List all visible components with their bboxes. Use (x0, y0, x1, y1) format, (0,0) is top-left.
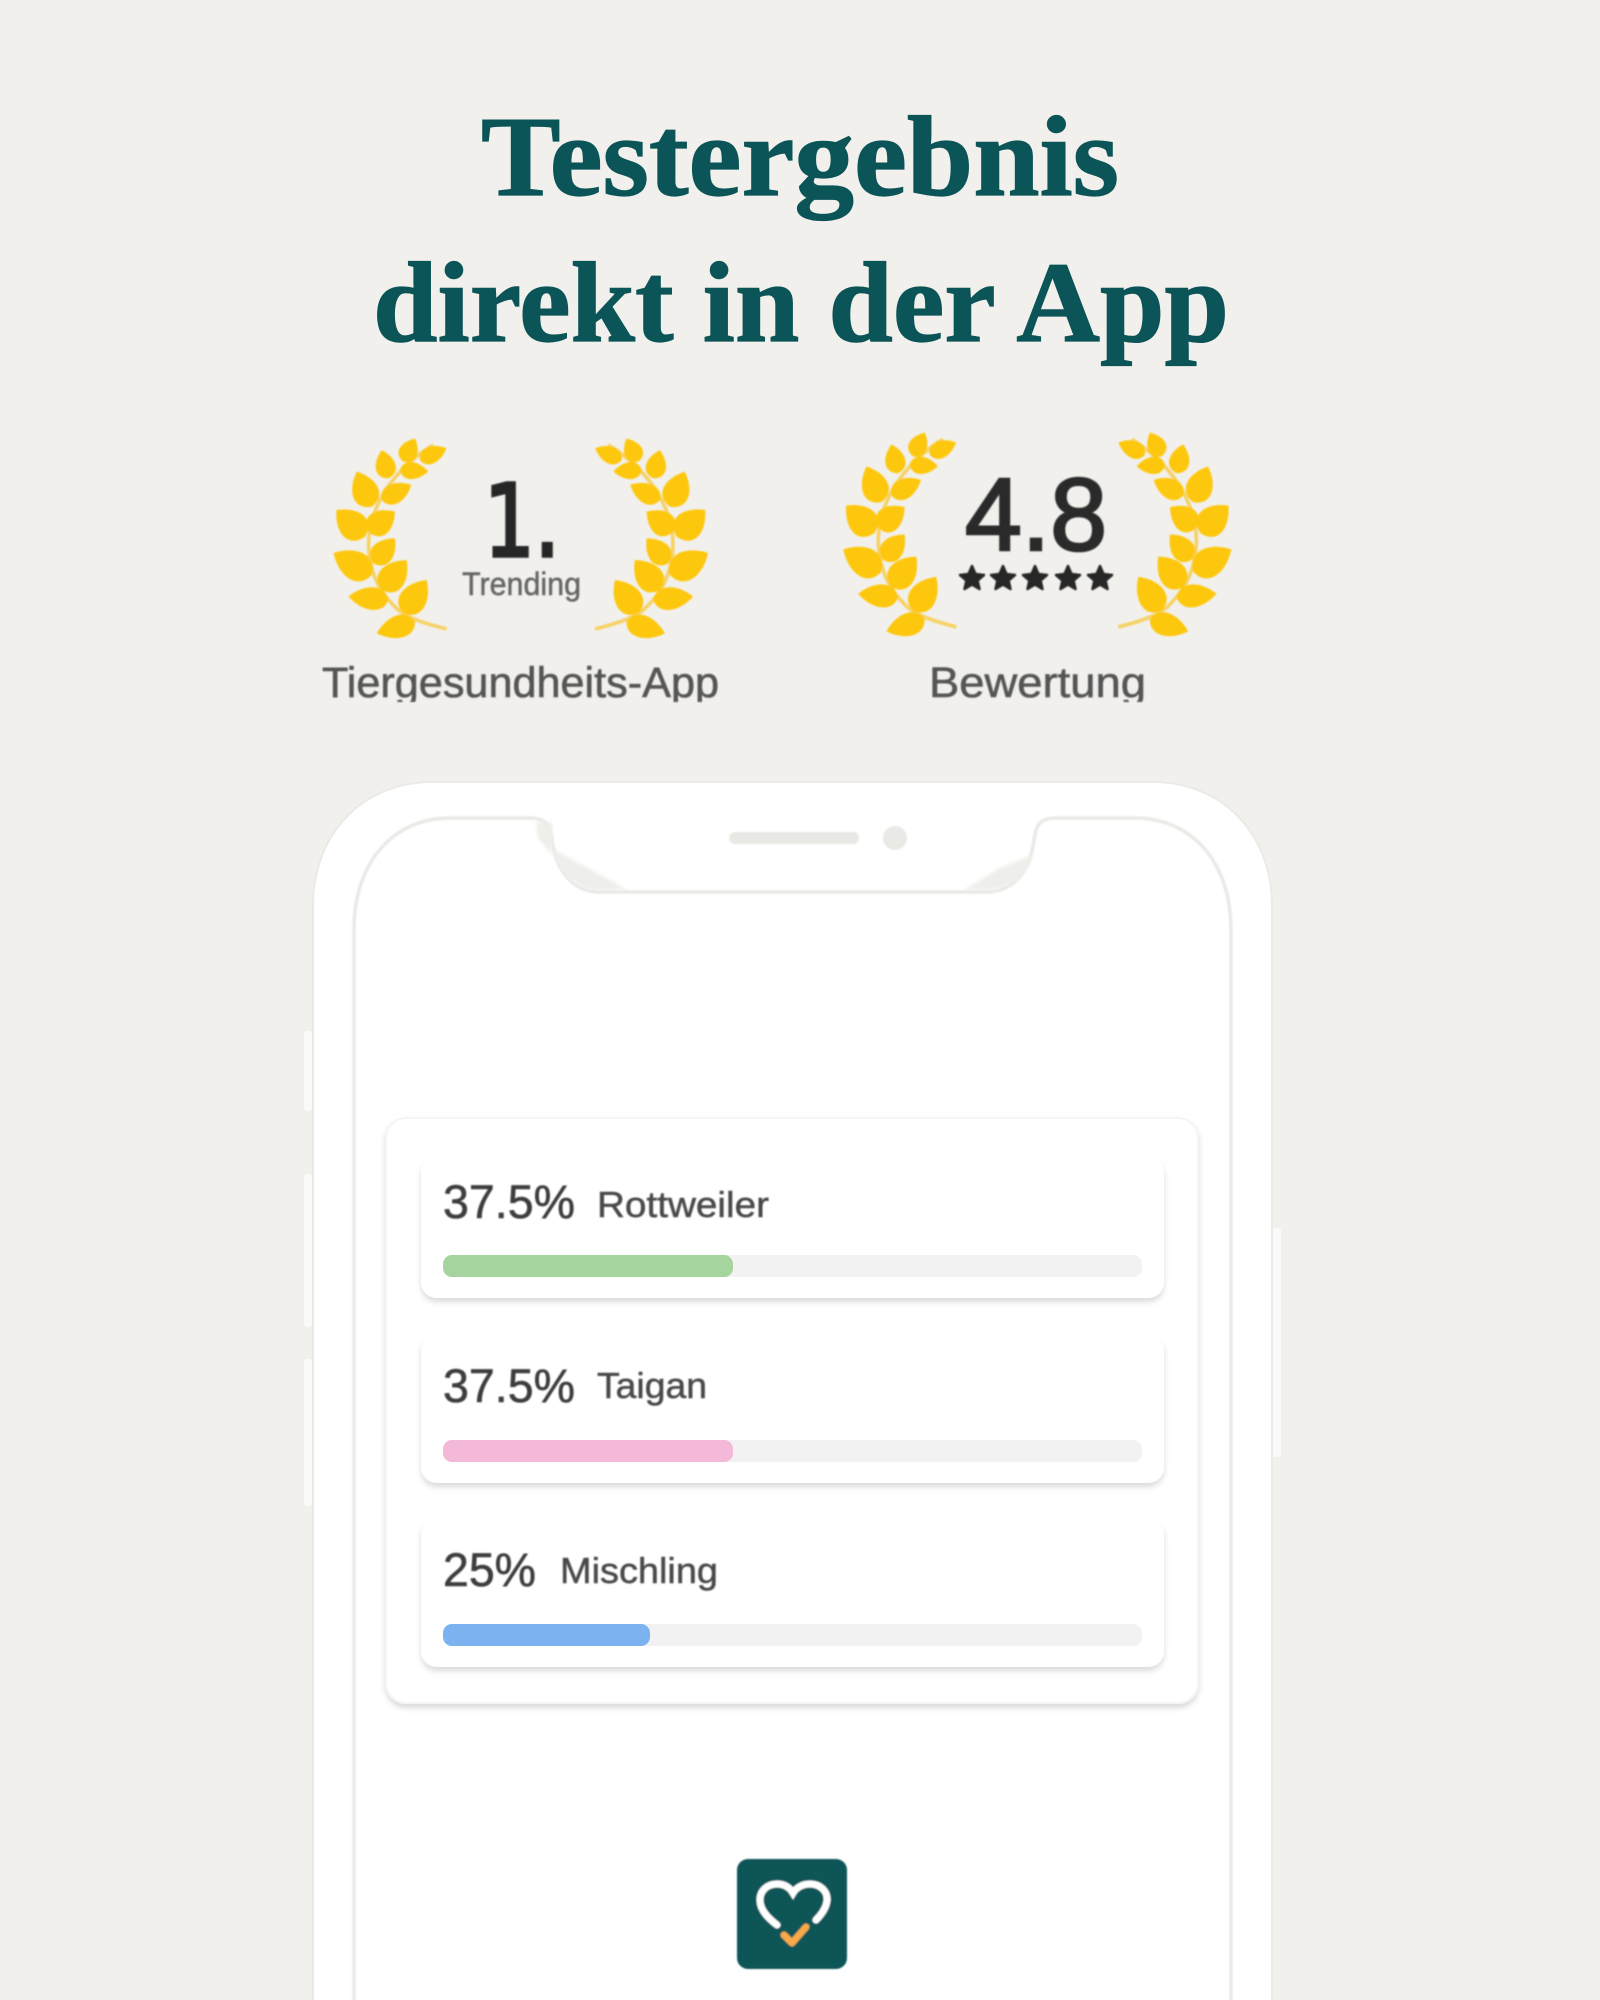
icon: right laurel branch (1115, 428, 1239, 642)
icon: left laurel branch (836, 428, 960, 642)
result card: Rottweiler (421, 1157, 1164, 1298)
icon: check mark (784, 1927, 806, 1943)
percentage: 37.5% (443, 1359, 575, 1412)
trending label: Trending (462, 566, 581, 602)
rank number: 1. (484, 463, 560, 580)
title: Testergebnis (481, 93, 1119, 220)
badge caption: Bewertung (929, 659, 1146, 707)
icon: left laurel branch (326, 434, 450, 644)
title: direkt in der App (373, 239, 1229, 366)
percentage: 37.5% (443, 1175, 575, 1228)
logo background (737, 1859, 847, 1969)
speaker (729, 832, 859, 844)
notch shading (536, 822, 1032, 890)
progress track (443, 1624, 1142, 1646)
icon: heart outline (760, 1884, 827, 1925)
camera (883, 826, 907, 850)
result card: Taigan (421, 1335, 1164, 1483)
progress track (443, 1440, 1142, 1462)
result card: Mischling (421, 1519, 1164, 1667)
screen outline with notch (354, 818, 1231, 2000)
badge: rating award (836, 428, 1239, 707)
title (373, 93, 1229, 366)
five stars (960, 566, 1112, 589)
badge: trending award (322, 434, 719, 707)
phone mockup (304, 782, 1281, 2000)
breed name: Taigan (597, 1365, 707, 1406)
icon: right laurel branch (592, 434, 715, 644)
panel background (386, 1118, 1198, 1703)
percentage: 25% (443, 1543, 536, 1596)
progress fill (443, 1624, 650, 1646)
progress fill (443, 1440, 733, 1462)
progress fill (443, 1255, 733, 1277)
app logo (737, 1859, 847, 1969)
breed name: Rottweiler (597, 1184, 769, 1225)
side buttons (304, 1031, 1281, 1506)
breed name: Mischling (560, 1550, 718, 1591)
rating number: 4.8 (965, 457, 1107, 572)
badge caption: Tiergesundheits-App (322, 659, 719, 707)
progress track (443, 1255, 1142, 1277)
results panel (386, 1118, 1198, 1703)
phone body (313, 782, 1272, 2000)
